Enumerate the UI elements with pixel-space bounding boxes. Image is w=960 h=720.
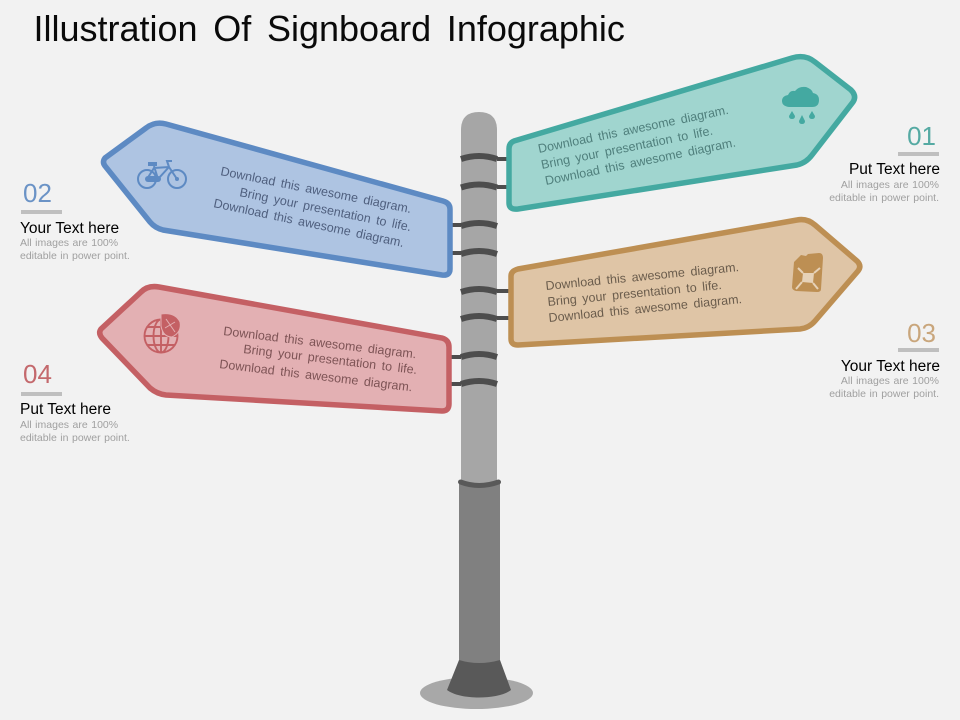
label 03: editable in power point. xyxy=(829,388,939,400)
sign 01 text xyxy=(537,103,737,188)
label 03: All images are 100% xyxy=(841,375,939,387)
label 04: editable in power point. xyxy=(20,432,130,444)
icon: rain cloud xyxy=(782,87,819,124)
label 02: Your Text here xyxy=(20,220,119,237)
sign 04: red arrow xyxy=(100,287,449,411)
sign 02 text: Download this awesome diagram. xyxy=(212,196,405,250)
label 01: 01 xyxy=(907,121,936,151)
sign 03 text: Download this awesome diagram. xyxy=(548,292,743,325)
title: Illustration Of Signboard Infographic xyxy=(34,8,625,49)
icon: jerrycan xyxy=(792,253,823,292)
sign 04 text xyxy=(219,324,418,394)
sign 03: tan arrow xyxy=(511,220,860,345)
sign 04 text: Bring your presentation to life. xyxy=(243,342,418,377)
label 04: 04 xyxy=(23,359,52,389)
sign 01: teal arrow xyxy=(509,57,855,209)
label 03 xyxy=(829,318,940,400)
sign 02: blue arrow xyxy=(104,123,450,275)
label 02: All images are 100% xyxy=(20,237,118,249)
label 04: All images are 100% xyxy=(20,419,118,431)
sign 02 text: Bring your presentation to life. xyxy=(238,185,413,234)
label 03: 03 xyxy=(907,318,936,348)
label 02 xyxy=(20,178,130,262)
sign 02 text xyxy=(212,164,413,250)
signpost pole xyxy=(420,112,533,709)
label 01: All images are 100% xyxy=(841,179,939,191)
sign 01 text: Bring your presentation to life. xyxy=(540,124,714,172)
sign 04 text: Download this awesome diagram. xyxy=(219,357,413,394)
sign 03 text: Download this awesome diagram. xyxy=(545,260,740,293)
label 02: 02 xyxy=(23,178,52,208)
label 01 xyxy=(829,121,940,204)
label 04: Put Text here xyxy=(20,401,111,418)
label 01: Put Text here xyxy=(849,161,940,178)
sign 02 text: Download this awesome diagram. xyxy=(219,164,413,216)
label 04 xyxy=(20,359,130,444)
sign 01 text: Download this awesome diagram. xyxy=(537,103,730,156)
label 01: editable in power point. xyxy=(829,192,939,204)
icon: globe with leaf xyxy=(144,314,180,352)
sign 01 text: Download this awesome diagram. xyxy=(544,136,737,188)
sign 03 text xyxy=(545,260,743,325)
label 03: Your Text here xyxy=(841,358,940,375)
icon: bicycle xyxy=(138,161,186,188)
sign 04 text: Download this awesome diagram. xyxy=(223,324,417,361)
sign 03 text: Bring your presentation to life. xyxy=(547,278,722,309)
label 02: editable in power point. xyxy=(20,250,130,262)
